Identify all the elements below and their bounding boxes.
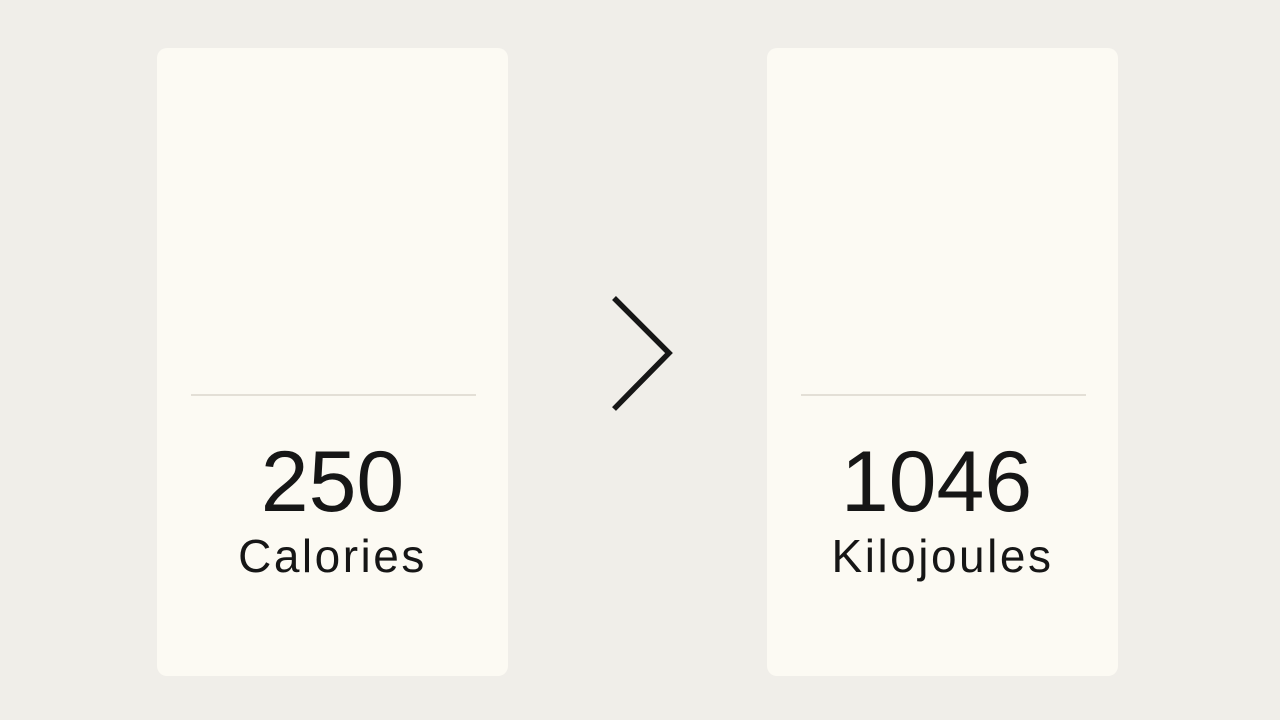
label: Calories: Calories <box>238 530 427 582</box>
number: 250: 250 <box>261 434 404 530</box>
label: Kilojoules: Kilojoules <box>832 530 1053 582</box>
arrow: chevron <box>612 296 673 411</box>
panel: calories card <box>157 48 508 676</box>
panel: kilojoules card <box>767 48 1118 676</box>
number: 1046: 1046 <box>841 434 1032 530</box>
